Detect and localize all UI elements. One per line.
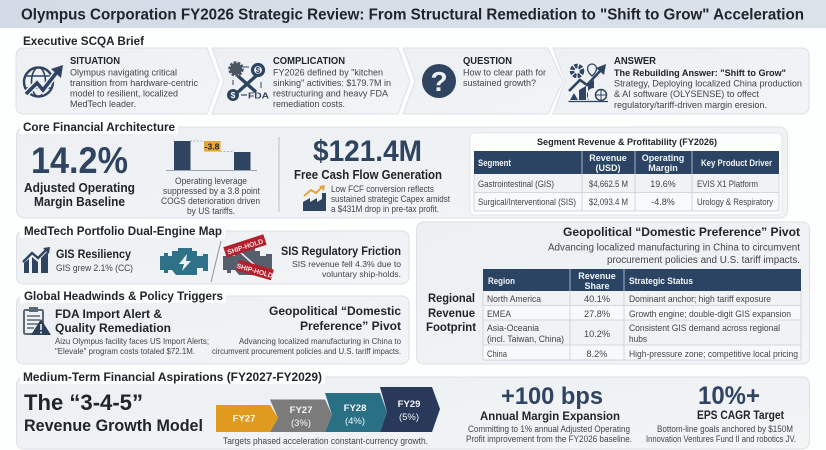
heading: regional revenue footprint: Revenue	[428, 306, 475, 320]
text: geopolitical pivot	[548, 225, 800, 266]
text: situation: MedTech leader.	[70, 99, 136, 110]
text: question: QUESTION	[463, 56, 512, 67]
table: segment revenue and profitability: Operating	[642, 153, 684, 163]
chart: phased growth chevrons: FY27	[290, 405, 312, 416]
text: FCF note: a $431M drop in pre-tax profit.	[331, 204, 439, 214]
text: FCF note	[331, 184, 450, 214]
text: GIS resiliency	[56, 249, 133, 273]
text: FDA import alert: FDA Import Alert &	[55, 307, 162, 321]
table: regional revenue: hubs	[629, 334, 647, 344]
icon: teal engine	[160, 248, 208, 275]
text: SIS regulatory friction: SIS revenue fell 4.3% due to	[292, 259, 401, 269]
stat: 14.2%: Margin Baseline	[34, 195, 125, 209]
icon: factory with growth arrow	[303, 185, 326, 211]
table: regional revenue: Consistent GIS demand across regional	[629, 323, 780, 333]
text: operating leverage note: suppressed by a 3.8 point	[163, 186, 260, 196]
text: complication: FY2026 defined by "kitchen	[273, 68, 383, 78]
text: FCF note: Low FCF conversion reflects	[331, 184, 434, 194]
text: operating leverage note: Operating leverage	[175, 176, 247, 186]
text: operating leverage note	[161, 176, 260, 216]
text: chevrons caption: Targets phased acceleration constant-currency growth.	[223, 436, 428, 446]
table: regional revenue	[483, 269, 801, 360]
stat: EPS CAGR	[646, 382, 796, 444]
table: segment revenue and profitability: Gastrointestinal (GIS)	[478, 179, 554, 189]
text: SIS regulatory friction	[281, 246, 401, 279]
panel: answer	[553, 48, 809, 114]
chart: phased growth chevrons: FY27	[233, 414, 255, 424]
icon: FDA alert clipboard	[24, 307, 51, 335]
text: FCF note: sustained strategic Capex amidst	[331, 194, 450, 204]
table: regional revenue: Dominant anchor; high tariff exposure	[629, 294, 771, 304]
table: segment revenue and profitability: Margin	[648, 163, 678, 173]
text: situation: SITUATION	[70, 56, 120, 67]
text: 3-4-5 model: The “3-4-5”	[24, 390, 143, 415]
table: regional revenue: China	[487, 349, 508, 359]
table: segment revenue and profitability: Segment	[478, 158, 511, 168]
table: segment revenue and profitability: Segment Revenue & Profitability (FY2026)	[537, 137, 717, 148]
stat: +100 bps	[466, 383, 632, 444]
stat: 14.2%: 14.2%	[31, 140, 128, 181]
text: situation: transition from hardware-centric	[70, 78, 198, 89]
text: complication: restructuring and heavy FDA	[273, 88, 389, 100]
panel: complication	[212, 48, 410, 114]
heading: medium-term aspirations: Medium-Term Financial Aspirations (FY2027-FY2029)	[23, 372, 322, 384]
stat: EPS CAGR: EPS CAGR Target	[697, 410, 784, 422]
icon: question mark	[422, 64, 456, 98]
text: GIS resiliency: GIS grew 2.1% (CC)	[56, 263, 133, 273]
chart: phased growth chevrons	[216, 387, 440, 432]
table: regional revenue: EMEA	[487, 309, 512, 319]
table: regional revenue: Asia-Oceania	[487, 323, 540, 333]
table: segment revenue and profitability: (USD)	[596, 163, 620, 173]
icon: grey engine with ship-hold tags: SHIP-HOLD	[236, 263, 274, 280]
table: segment revenue and profitability: EVIS X1 Platform	[697, 179, 758, 189]
chart: margin bridge	[166, 141, 257, 170]
table: regional revenue: 10.2%	[584, 329, 610, 339]
table: segment revenue and profitability: Key Product Driver	[701, 158, 772, 168]
stat: +100 bps: +100 bps	[501, 383, 603, 410]
table: regional revenue: High-pressure zone; competitive local pricing	[629, 349, 798, 359]
chart: phased growth chevrons: (4%)	[345, 416, 365, 427]
icon: gear, pin and rising chart	[568, 64, 608, 102]
text: GIS resiliency: GIS Resiliency	[56, 249, 132, 261]
heading: regional revenue footprint	[426, 291, 476, 334]
heading: core financial architecture: Core Financial Architecture	[23, 120, 175, 134]
text: situation: Olympus navigating critical	[70, 68, 177, 78]
text: domestic preference pivot: circumvent procurement policies and U.S. tariff impacts.	[212, 347, 401, 356]
table: segment revenue and profitability: $4,662.5 M	[589, 179, 628, 189]
text: geopolitical pivot: Geopolitical “Domestic Preference” Pivot	[563, 225, 800, 239]
text: FDA import alert	[55, 307, 209, 356]
text: FDA import alert: Quality Remediation	[55, 321, 171, 335]
table: segment revenue and profitability: Revenue	[589, 153, 627, 163]
table: segment revenue and profitability: -4.8%	[651, 197, 675, 207]
text: complication: sinking" activities: $179.7M in	[273, 78, 391, 89]
text: 3-4-5 model: Revenue Growth Model	[24, 417, 203, 435]
table: regional revenue: Region	[488, 276, 515, 286]
panel: global headwinds	[16, 289, 409, 364]
panel: question	[403, 48, 563, 114]
stat: +100 bps: Annual Margin Expansion	[480, 409, 620, 423]
panel: regional revenue footprint	[416, 222, 810, 364]
text: complication	[273, 56, 391, 110]
heading: global headwinds: Global Headwinds & Policy Triggers	[24, 289, 223, 303]
stat: 14.2%: Adjusted Operating	[24, 181, 135, 195]
panel: medium-term financial aspirations	[16, 370, 810, 449]
text: answer: & AI software (OLYSENSE) to offect	[614, 89, 759, 100]
table: regional revenue: Revenue	[578, 271, 616, 281]
text: question	[463, 56, 546, 89]
icon: gears and tools: $	[231, 90, 236, 100]
icon: grey engine with ship-hold tags	[223, 234, 275, 280]
heading: regional revenue footprint: Regional	[428, 291, 475, 305]
text: domestic preference pivot: Geopolitical “Domestic	[269, 304, 401, 318]
table: regional revenue: North America	[487, 294, 542, 304]
table: segment revenue and profitability: $2,093.4 M	[589, 197, 628, 207]
stat: EPS CAGR: Innovation Ventures Fund II and robotics JV.	[646, 434, 796, 444]
table: segment revenue and profitability	[470, 133, 782, 215]
icon: grey engine with ship-hold tags: SHIP-HOLD	[227, 238, 264, 257]
icon: GIS growth chart	[23, 247, 50, 273]
heading: medtech portfolio: MedTech Portfolio Dual-Engine Map	[24, 224, 222, 238]
panel: core financial architecture	[16, 120, 788, 218]
table: segment revenue and profitability: 19.6%	[650, 179, 676, 189]
chart: phased growth chevrons: FY28	[344, 403, 366, 414]
text: domestic preference pivot: Preference” Pivot	[300, 319, 401, 333]
heading: regional revenue footprint: Footprint	[426, 320, 476, 334]
text: answer: Strategy, Deploying localized China production	[614, 78, 802, 90]
icon: gears and tools	[227, 63, 269, 101]
text: answer: ANSWER	[614, 56, 657, 67]
text: complication: remediation costs.	[273, 99, 345, 110]
text: geopolitical pivot: Advancing localized manufacturing in China to circumvent	[548, 242, 800, 254]
text: SIS regulatory friction: SIS Regulatory Friction	[281, 246, 401, 258]
title: Olympus Corporation FY2026 Strategic Review: From Structural Remediation to "Shift to Grow" Acceleration	[21, 6, 804, 24]
text: complication: COMPLICATION	[273, 56, 345, 67]
panel: situation	[16, 48, 219, 114]
text: 3-4-5 model	[24, 390, 203, 435]
heading: Executive SCQA Brief: Executive SCQA Brief	[23, 34, 145, 48]
stat: +100 bps: Profit improvement from the FY2026 baseline.	[466, 434, 632, 444]
table: segment revenue and profitability: Urology & Respiratory	[697, 197, 773, 207]
table: regional revenue: Strategic Status	[629, 276, 693, 286]
table: segment revenue and profitability: Surgical/Interventional (SIS)	[478, 197, 576, 207]
chart: margin bridge: -3.8	[205, 142, 220, 152]
text: answer: regulatory/tariff-driven margin eresion.	[614, 100, 767, 111]
chart: phased growth chevrons: (3%)	[291, 418, 311, 429]
text: FDA import alert: Aizu Olympus facility faces US Import Alerts;	[55, 337, 209, 346]
icon: question mark: ?	[430, 66, 448, 97]
text: FDA import alert: "Elevale" program costs totaled $72.1M.	[55, 347, 195, 356]
title	[0, 0, 826, 28]
text: answer	[614, 56, 802, 111]
text: situation	[70, 56, 198, 110]
table: regional revenue: 40.1%	[584, 294, 610, 304]
text: question: sustained growth?	[463, 78, 536, 89]
stat: EPS CAGR: 10%+	[698, 382, 760, 410]
table: regional revenue: Share	[584, 281, 610, 291]
text: geopolitical pivot: procurement policies and U.S. tariff impacts.	[607, 255, 800, 266]
chart: phased growth chevrons: (5%)	[399, 412, 419, 423]
text: answer: The Rebuilding Answer: "Shift to Grow"	[614, 68, 786, 79]
chart: phased growth chevrons: FY29	[398, 399, 420, 410]
table: regional revenue: 8.2%	[587, 349, 607, 359]
icon: gears and tools: $	[256, 66, 261, 75]
stat: 14.2%	[24, 140, 135, 209]
stat: +100 bps: Committing to 1% annual Adjusted Operating	[468, 424, 630, 434]
stat: free cash flow: Free Cash Flow Generation	[294, 168, 442, 182]
stat: EPS CAGR: Bottom-line goals anchored by $150M	[657, 424, 793, 434]
text: situation: model to resilient, localized	[70, 88, 178, 100]
text: operating leverage note: by US tariffs.	[187, 206, 235, 216]
icon: globe with arrow	[24, 65, 63, 96]
icon: gears and tools: FDA	[248, 90, 269, 100]
text: domestic preference pivot	[212, 304, 401, 356]
text: question: How to clear path for	[463, 68, 546, 78]
table: regional revenue: Growth engine; double-digit GIS expansion	[629, 309, 791, 319]
table: regional revenue: (incl. Taiwan, China)	[487, 334, 564, 344]
text: domestic preference pivot: Advancing localized manufacturing in China to	[239, 337, 401, 346]
stat: free cash flow	[294, 135, 442, 182]
panel: SCQA brief	[16, 48, 809, 114]
text: SIS regulatory friction: voluntary ship-holds.	[322, 269, 401, 279]
stat: free cash flow: $121.4M	[313, 135, 422, 168]
table: regional revenue: 27.8%	[584, 309, 610, 319]
text: operating leverage note: COGS deterioration driven	[161, 196, 260, 206]
panel: medtech portfolio	[16, 224, 409, 284]
